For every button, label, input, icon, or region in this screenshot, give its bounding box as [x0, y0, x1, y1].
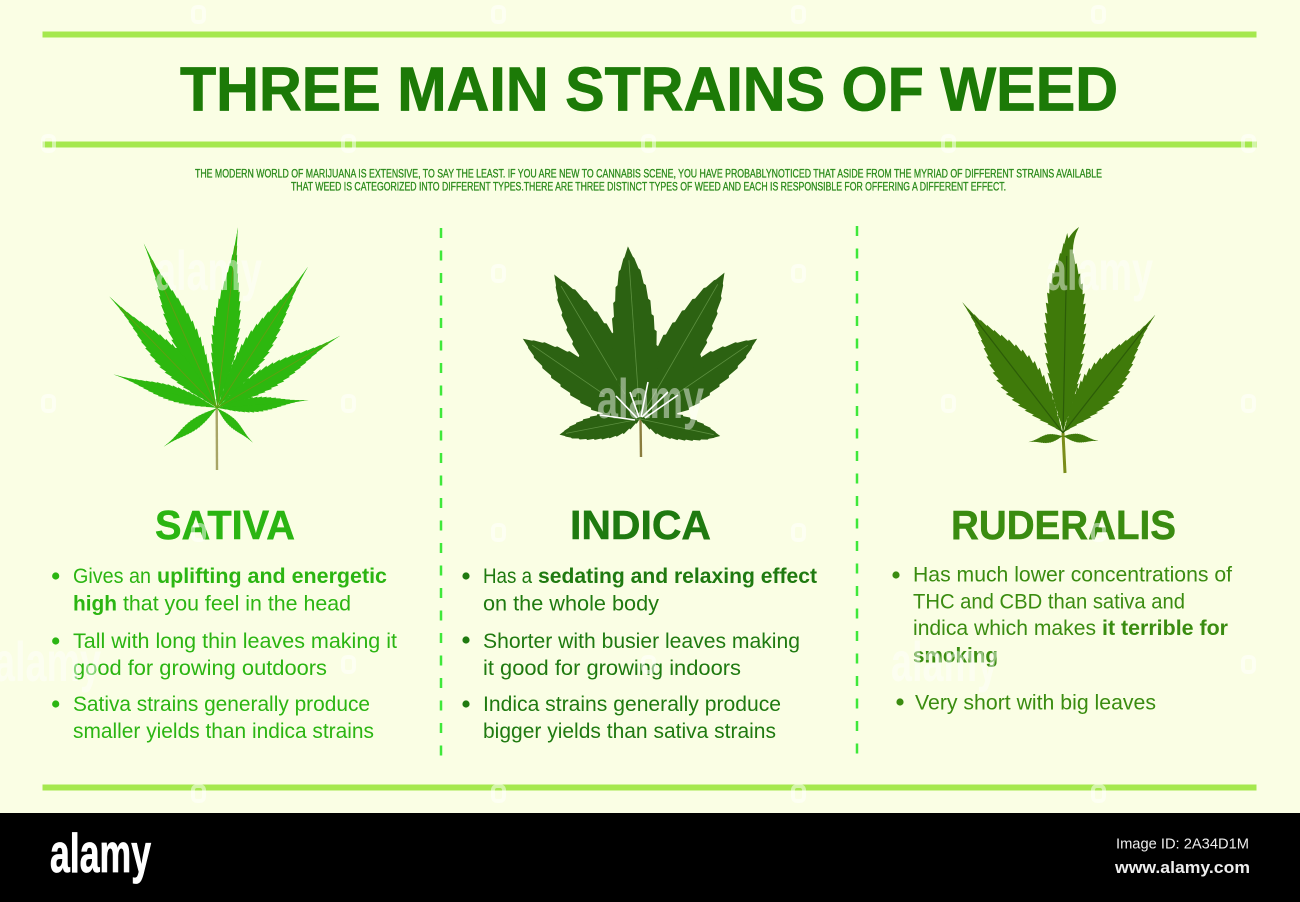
bullets: sativa: uplifting and energetic: [157, 564, 387, 588]
watermark: alamy overlays: alamy: [155, 239, 262, 302]
bullets: indica: [462, 564, 817, 743]
bullets: indica: on the whole body: [483, 592, 659, 616]
bullets: sativa: that you feel in the head: [123, 592, 351, 616]
bullets: indica: bigger yields than sativa strains: [483, 719, 776, 743]
bullets: indica: Has a: [483, 564, 532, 588]
bullets: ruderalis: it terrible for: [1102, 616, 1229, 640]
watermark: alamy overlays: [0, 239, 1153, 693]
site url: www.alamy.com: [1114, 858, 1250, 877]
bullets: sativa: Tall with long thin leaves making it: [73, 629, 397, 653]
icon: sativa leaf: [100, 226, 346, 470]
divider: [856, 226, 858, 755]
panel: sativa: [52, 502, 397, 743]
bullets: ruderalis: [892, 562, 1232, 714]
icon: indica leaf: [511, 245, 769, 457]
header rule: [42, 142, 1256, 148]
top rule: [42, 32, 1256, 38]
footer bar: [0, 813, 1300, 902]
bullets: indica: Shorter with busier leaves making: [483, 629, 800, 653]
divider: [440, 228, 442, 760]
bullets: indica: it good for growing indoors: [483, 656, 741, 680]
bullets: ruderalis: THC and CBD than sativa and: [913, 590, 1185, 614]
title: THREE MAIN STRAINS OF WEED: [180, 56, 1118, 124]
bullets: indica: sedating and relaxing effect: [538, 564, 817, 588]
panel: indica: [462, 502, 817, 743]
icon: ruderalis leaf: [945, 227, 1171, 473]
watermark: alamy overlays: alamy: [597, 367, 704, 430]
watermark: alamy overlays: alamy: [891, 630, 998, 693]
bullets: sativa: good for growing outdoors: [73, 656, 327, 680]
heading: sativa: SATIVA: [155, 502, 295, 548]
intro text: [195, 168, 1102, 194]
bullets: ruderalis: indica which makes: [913, 616, 1096, 640]
bullets: ruderalis: Has much lower concentrations of: [913, 562, 1232, 586]
bullets: sativa: smaller yields than indica strains: [73, 719, 374, 743]
image id: Image ID: 2A34D1M: [1116, 836, 1249, 852]
heading: indica: INDICA: [570, 502, 711, 548]
panel: ruderalis: [892, 502, 1232, 714]
bullets: ruderalis: smoking: [913, 644, 998, 668]
bottom rule: [42, 784, 1256, 790]
bullets: sativa: high: [73, 592, 117, 616]
heading: ruderalis: RUDERALIS: [951, 502, 1176, 548]
watermark: alamy overlays: alamy: [1046, 239, 1153, 302]
bullets: sativa: Gives an: [73, 564, 151, 588]
footer logo: alamy: [50, 822, 151, 884]
bullets: sativa: Sativa strains generally produce: [73, 692, 370, 716]
intro text: THAT WEED IS CATEGORIZED INTO DIFFERENT TYPES.THERE ARE THREE DISTINCT TYPES OF WEED AND EACH IS RESPONSIBLE FOR OFFERING A DIFFERENT EFFECT.: [291, 182, 1006, 194]
bullets: indica: Indica strains generally produce: [483, 692, 781, 716]
bullets: sativa: [52, 564, 397, 743]
bullets: ruderalis: Very short with big leaves: [915, 690, 1156, 714]
